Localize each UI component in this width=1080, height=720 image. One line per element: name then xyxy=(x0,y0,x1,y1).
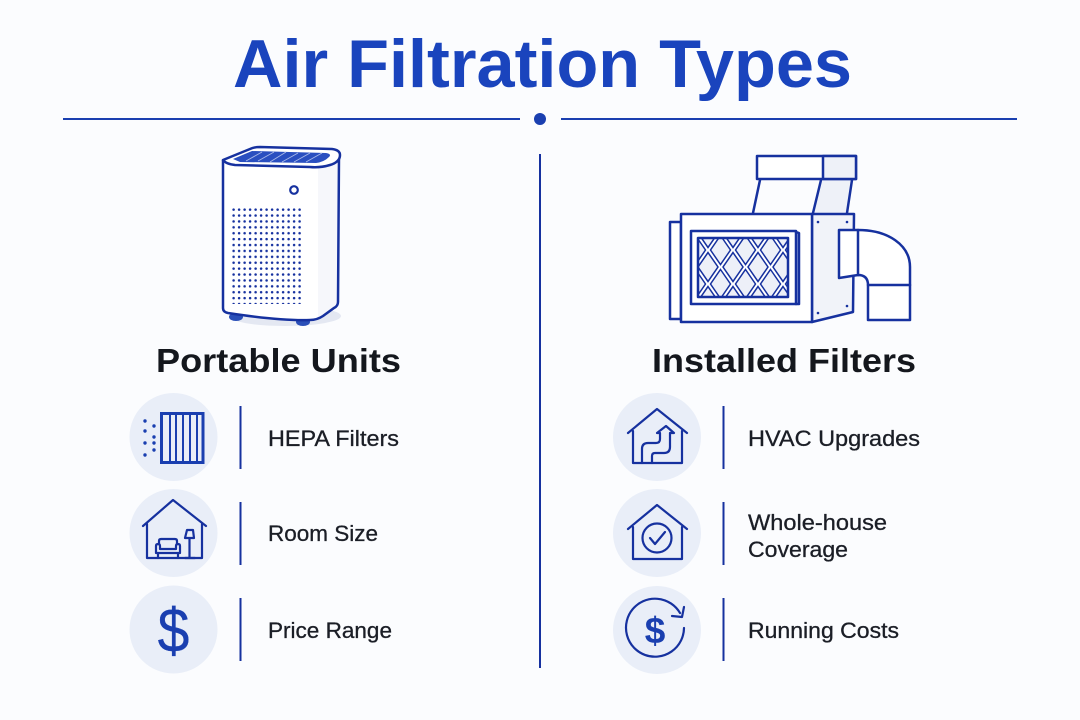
icon: house with duct xyxy=(628,409,687,463)
panel: installed filters xyxy=(613,156,920,674)
icon: house with check xyxy=(628,505,687,559)
item: running costs xyxy=(613,586,899,674)
item: HVAC upgrades xyxy=(613,393,920,481)
item: price range xyxy=(130,586,392,674)
icon: dollar with cycle arrow: $ xyxy=(645,610,666,651)
label: Price Range xyxy=(268,618,392,643)
item: room size xyxy=(130,489,378,577)
column divider xyxy=(539,154,541,668)
label: Coverage xyxy=(748,537,848,562)
label: Room Size xyxy=(268,521,378,546)
icon: installed filter unit xyxy=(670,156,910,322)
title: Air Filtration Types xyxy=(233,26,852,102)
panel: portable units xyxy=(130,147,401,674)
label: Whole-house xyxy=(748,510,887,535)
heading: portable units: Portable Units xyxy=(156,342,401,379)
label: Running Costs xyxy=(748,618,899,643)
icon: air purifier xyxy=(223,147,341,326)
icon: dollar sign: $ xyxy=(158,596,189,666)
icon: dollar with cycle arrow xyxy=(626,599,684,657)
label xyxy=(748,510,887,562)
label: HVAC Upgrades xyxy=(748,426,920,451)
icon: HEPA filter xyxy=(143,414,203,462)
icon: house with sofa and lamp xyxy=(143,500,206,558)
item: HEPA filters xyxy=(130,393,399,481)
heading: installed filters: Installed Filters xyxy=(652,342,916,379)
item: whole-house coverage xyxy=(613,489,887,577)
title divider with dot xyxy=(63,113,1017,125)
label: HEPA Filters xyxy=(268,426,399,451)
